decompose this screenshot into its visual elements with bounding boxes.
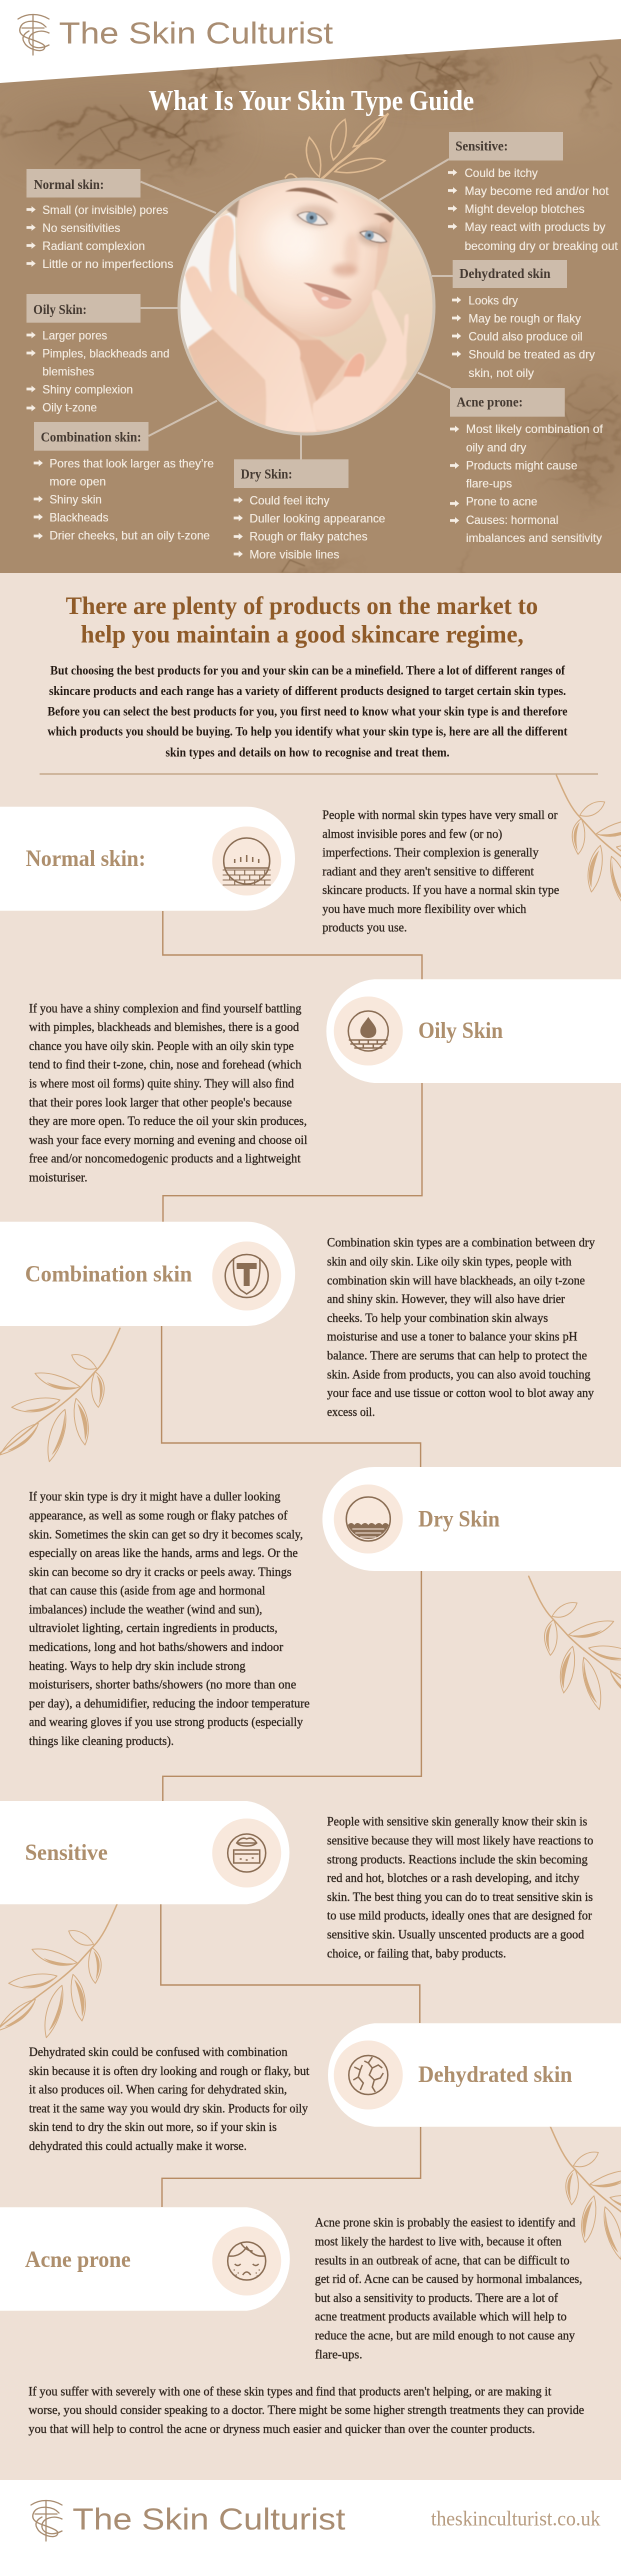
section: sensitive pill	[0, 1801, 289, 1904]
icon: normal skin	[223, 838, 271, 885]
panel: acne summary: flare-ups	[466, 478, 512, 491]
icon: footer logo	[31, 2500, 62, 2541]
text: sensitive: red and hot, blotches or a rash developing, and itchy	[327, 1871, 580, 1885]
panel: oily summary: blemishes	[42, 365, 94, 378]
panel: dry summary: Could feel itchy	[250, 494, 330, 507]
panel: oily summary: Oily t-zone	[42, 402, 97, 415]
heading: combination skin: Combination skin	[25, 1262, 192, 1287]
intro heading	[66, 591, 538, 649]
text: acne prone: get rid of. Acne can be caused by hormonal imbalances,	[315, 2272, 582, 2286]
text: combination skin: moisturise and use a toner to balance your skins pH	[327, 1330, 578, 1344]
text: dehydrated skin: Dehydrated skin could be confused with combination	[29, 2045, 288, 2059]
text: combination skin: and shiny skin. However, they will also have drier	[327, 1292, 565, 1306]
text: combination skin: balance. There are serums that can help to protect the	[327, 1348, 587, 1362]
text: normal skin: you have much more flexibility over which	[322, 902, 526, 916]
panel: dehydrated summary: Looks dry	[468, 295, 518, 308]
text: oily skin: chance you have oily skin. People with an oily skin type	[29, 1039, 294, 1053]
panel: sensitive summary: May react with products by	[465, 221, 606, 234]
panel: sensitive summary: Might develop blotches	[465, 203, 585, 216]
text: acne prone: flare-ups.	[315, 2348, 362, 2362]
heading: normal skin: Normal skin:	[26, 846, 146, 871]
text: dry skin: If your skin type is dry it might have a duller looking	[29, 1490, 280, 1504]
panel: normal skin summary	[26, 169, 174, 271]
icon: combination skin	[225, 1254, 268, 1298]
text: sensitive: sensitive skin. Usually unscented products are a good	[327, 1928, 584, 1942]
panel: dry summary: Rough or flaky patches	[250, 531, 368, 544]
panel: normal skin summary: Small (or invisible) pores	[42, 204, 168, 217]
panel: dehydrated summary: Could also produce oil	[468, 331, 583, 344]
text: sensitive: choice, or failing that, baby products.	[327, 1946, 506, 1960]
text: combination skin: skin and oily skin. Like oily skin types, people with	[327, 1254, 572, 1268]
text: acne prone: reduce the acne, but are mild enough to not cause any	[315, 2328, 576, 2342]
leaf: top right	[556, 775, 621, 909]
leaf: right 2	[529, 1576, 621, 1710]
text: normal skin	[322, 808, 559, 935]
text: dry skin: ultraviolet lighting, certain ingredients in products,	[29, 1621, 278, 1635]
leaf: left 1	[0, 1328, 120, 1462]
panel: sensitive summary: becoming dry or breaking out	[465, 240, 619, 253]
footer brand name: The Skin Culturist	[72, 2501, 346, 2536]
text: dry skin: that can cause this (aside from age and hormonal	[29, 1584, 266, 1598]
icon: acne prone	[228, 2242, 266, 2280]
text: dry skin: skin. Sometimes the skin can get so dry it becomes scaly,	[29, 1527, 303, 1541]
section: normal skin pill	[0, 807, 295, 911]
text: dry skin: especially on areas like the hands, arms and legs. Or the	[29, 1546, 298, 1560]
text: normal skin: imperfections. Their complexion is generally	[322, 846, 539, 860]
text: oily skin: they are more open. To reduce the oil your skin produces,	[29, 1114, 307, 1128]
text: acne prone: but also a sensitivity to products. There are a lot of	[315, 2291, 559, 2305]
text: oily skin: that their pores look larger that other people's because	[29, 1095, 292, 1109]
text: sensitive	[327, 1815, 593, 1960]
text: sensitive: People with sensitive skin generally know their skin is	[327, 1815, 588, 1829]
intro paragraph: Before you can select the best products for you, you first need to know what your skin type is and therefore	[48, 704, 568, 718]
text: dehydrated skin: skin tend to dry the skin out more, so if your skin is	[29, 2120, 277, 2134]
panel: acne summary	[450, 388, 604, 545]
panel: combination summary: Blackheads	[50, 512, 109, 525]
text: dry skin	[29, 1490, 310, 1748]
website address: theskinculturist.co.uk	[431, 2506, 601, 2530]
intro paragraph	[48, 664, 568, 759]
text: sensitive: to use mild products, ideally ones that are designed for	[327, 1909, 592, 1923]
panel: combination summary: Pores that look larger as they’re	[50, 457, 214, 470]
section: dry skin pill	[322, 1467, 621, 1571]
text: dehydrated skin: dehydrated this could actually make it worse.	[29, 2139, 247, 2153]
intro heading: help you maintain a good skincare regime,	[81, 620, 524, 649]
panel: acne summary: oily and dry	[466, 441, 526, 454]
intro paragraph: skincare products and each range has a variety of different products designed to target certain skin types.	[49, 684, 566, 698]
panel: oily summary: Shiny complexion	[42, 384, 133, 397]
panel: dry summary	[234, 459, 385, 562]
panel: acne summary: Prone to acne	[466, 496, 537, 509]
icon: dry skin	[346, 1497, 390, 1541]
panel: acne summary: Most likely combination of	[466, 423, 604, 436]
icon: oily skin	[348, 1011, 388, 1051]
text: oily skin: If you have a shiny complexion and find yourself battling	[29, 1001, 301, 1015]
text: acne prone: most likely the hardest to live with, because it often	[315, 2234, 562, 2248]
hero panel: marble banner	[0, 30, 621, 575]
connector lines	[141, 159, 453, 460]
heading: sensitive: Sensitive	[25, 1840, 108, 1865]
text: dehydrated skin: it also produces oil. When caring for dehydrated skin,	[29, 2083, 287, 2097]
panel: normal skin summary: Normal skin:	[34, 178, 104, 193]
panel: combination summary: Drier cheeks, but an oily t-zone	[50, 530, 210, 543]
panel: normal skin summary: No sensitivities	[42, 222, 121, 235]
icon: brand logo	[18, 14, 49, 55]
panel: acne summary: Products might cause	[466, 459, 577, 472]
text: oily skin: is where most oil forms) quite shiny. They will also find	[29, 1076, 294, 1090]
intro paragraph: skin types and details on how to recognise and treat them.	[166, 745, 450, 759]
text: oily skin: moisturiser.	[29, 1171, 88, 1185]
text: normal skin: products you use.	[322, 921, 407, 935]
section: combination skin pill	[0, 1222, 295, 1326]
heading: acne prone: Acne prone	[25, 2247, 131, 2272]
section: dehydrated skin pill	[328, 2023, 621, 2127]
text: dry skin: per day), a dehumidifier, reducing the indoor temperature	[29, 1696, 310, 1710]
icon: sensitive	[228, 1834, 266, 1872]
text: oily skin: wash your face every morning and evening and choose oil	[29, 1133, 308, 1147]
footer band	[0, 2480, 621, 2560]
text: sensitive: skin. The best thing you can do to treat sensitive skin is	[327, 1890, 593, 1904]
text: oily skin: free and/or noncomedogenic products and a lightweight	[29, 1152, 301, 1166]
text: combination skin	[327, 1236, 596, 1419]
panel: acne summary: Acne prone:	[457, 396, 523, 411]
panel: combination summary	[34, 422, 214, 543]
text: acne prone: acne treatment products available which will help to	[315, 2310, 567, 2324]
text: dry skin: things like cleaning products).	[29, 1734, 174, 1748]
text: combination skin: excess oil.	[327, 1405, 375, 1419]
title: What Is Your Skin Type Guide	[148, 86, 474, 117]
text: normal skin: radiant and they aren't sensitive to different	[322, 864, 535, 878]
panel: dehydrated summary: May be rough or flaky	[468, 313, 581, 326]
text: acne prone	[315, 2216, 582, 2362]
text: acne prone: results in an outbreak of acne, that can be difficult to	[315, 2253, 570, 2267]
text: combination skin: your face and use tissue or cotton wool to blot away any	[327, 1386, 595, 1400]
section: acne prone pill	[0, 2207, 290, 2311]
section: oily skin pill	[326, 979, 621, 1083]
text: sensitive: sensitive because they will most likely have reactions to	[327, 1834, 593, 1848]
text: dehydrated skin	[29, 2045, 310, 2153]
text: sensitive: strong products. Reactions include the skin becoming	[327, 1852, 588, 1866]
brand name: The Skin Culturist	[59, 16, 333, 50]
text: combination skin: Combination skin types are a combination between dry	[327, 1236, 596, 1250]
connector path between sections	[161, 911, 422, 2207]
text: normal skin: skincare products. If you have a normal skin type	[322, 883, 559, 897]
text: oily skin: tend to find their t-zone, chin, nose and forehead (which	[29, 1058, 301, 1072]
panel: dehydrated summary: Should be treated as dry	[468, 349, 595, 362]
text: dry skin: skin can become so dry it cracks or peels away. Things	[29, 1565, 292, 1579]
intro heading: There are plenty of products on the market to	[66, 591, 538, 620]
panel: sensitive summary: May become red and/or hot	[465, 185, 609, 198]
closing paragraph	[28, 2384, 584, 2436]
panel: dry summary: More visible lines	[250, 549, 340, 562]
text: oily skin	[29, 1001, 308, 1185]
heading: dehydrated skin: Dehydrated skin	[418, 2062, 572, 2087]
closing paragraph: worse, you should consider speaking to a doctor. There might be some higher strength treatments they can provide	[28, 2403, 584, 2417]
text: dry skin: appearance, as well as some rough or flaky patches of	[29, 1508, 288, 1522]
header band	[0, 0, 621, 100]
panel: oily summary: Pimples, blackheads and	[42, 347, 170, 360]
text: dry skin: moisturisers, shorter baths/showers (no more than one	[29, 1678, 296, 1692]
icon: dehydrated skin	[349, 2056, 388, 2094]
panel: sensitive summary: Could be itchy	[465, 167, 538, 180]
panel: acne summary: imbalances and sensitivity	[466, 532, 602, 545]
text: oily skin: with pimples, blackheads and blemishes, there is a good	[29, 1020, 299, 1034]
panel: dehydrated summary: skin, not oily	[468, 367, 534, 380]
text: combination skin: skin. Aside from products, you can also avoid touching	[327, 1367, 590, 1381]
panel: dry summary: Dry Skin:	[241, 467, 292, 482]
text: combination skin: combination skin will have blackheads, an oily t-zone	[327, 1273, 585, 1287]
text: dehydrated skin: treat it the same way you would dry skin. Products for oily	[29, 2101, 309, 2115]
leaf: left 2	[0, 1904, 117, 2038]
intro paragraph: But choosing the best products for you and your skin can be a minefield. There a lot of different ranges of	[50, 664, 566, 678]
text: dry skin: and wearing gloves if you use strong products (especially	[29, 1715, 304, 1729]
panel: dehydrated summary: Dehydrated skin	[459, 267, 551, 282]
decorative leaf above portrait	[285, 113, 388, 180]
panel: combination summary: more open	[50, 475, 106, 488]
text: normal skin: almost invisible pores and few (or no)	[322, 827, 502, 841]
panel: dehydrated summary	[452, 260, 595, 380]
text: dehydrated skin: skin because it is often dry looking and rough or flaky, but	[29, 2064, 310, 2078]
text: acne prone: Acne prone skin is probably the easiest to identify and	[315, 2216, 575, 2230]
text: combination skin: cheeks. To help your combination skin always	[327, 1311, 548, 1325]
panel: sensitive summary	[448, 132, 619, 253]
portrait photo in circle	[170, 173, 440, 440]
panel: normal skin summary: Radiant complexion	[42, 240, 145, 253]
closing paragraph: If you suffer with severely with one of these skin types and find that products aren't helping, or are making it	[28, 2384, 552, 2398]
heading: oily skin: Oily Skin	[418, 1018, 503, 1043]
panel: oily summary: Oily Skin:	[33, 303, 87, 318]
panel: oily summary: Larger pores	[42, 329, 107, 342]
heading: dry skin: Dry Skin	[418, 1507, 500, 1532]
panel: dry summary: Duller looking appearance	[250, 513, 385, 526]
panel: combination summary: Shiny skin	[50, 493, 102, 506]
panel: normal skin summary: Little or no imperfections	[42, 258, 174, 271]
panel: combination summary: Combination skin:	[41, 431, 141, 446]
text: dry skin: medications, long and hot baths/showers and indoor	[29, 1640, 283, 1654]
panel: sensitive summary: Sensitive:	[455, 140, 508, 155]
text: normal skin: People with normal skin types have very small or	[322, 808, 558, 822]
leaf: right 3	[550, 2126, 621, 2259]
closing paragraph: you that will help to control the acne or dryness much easier and quicker than over the counter products.	[28, 2422, 535, 2436]
intro paragraph: which products you should be buying. To help you identify what your skin type is, here are all the different	[48, 725, 568, 739]
text: dry skin: heating. Ways to help dry skin include strong	[29, 1659, 246, 1673]
panel: acne summary: Causes: hormonal	[466, 514, 558, 527]
text: dry skin: imbalances) include the weather (wind and sun),	[29, 1602, 262, 1616]
panel: oily summary	[26, 294, 170, 415]
